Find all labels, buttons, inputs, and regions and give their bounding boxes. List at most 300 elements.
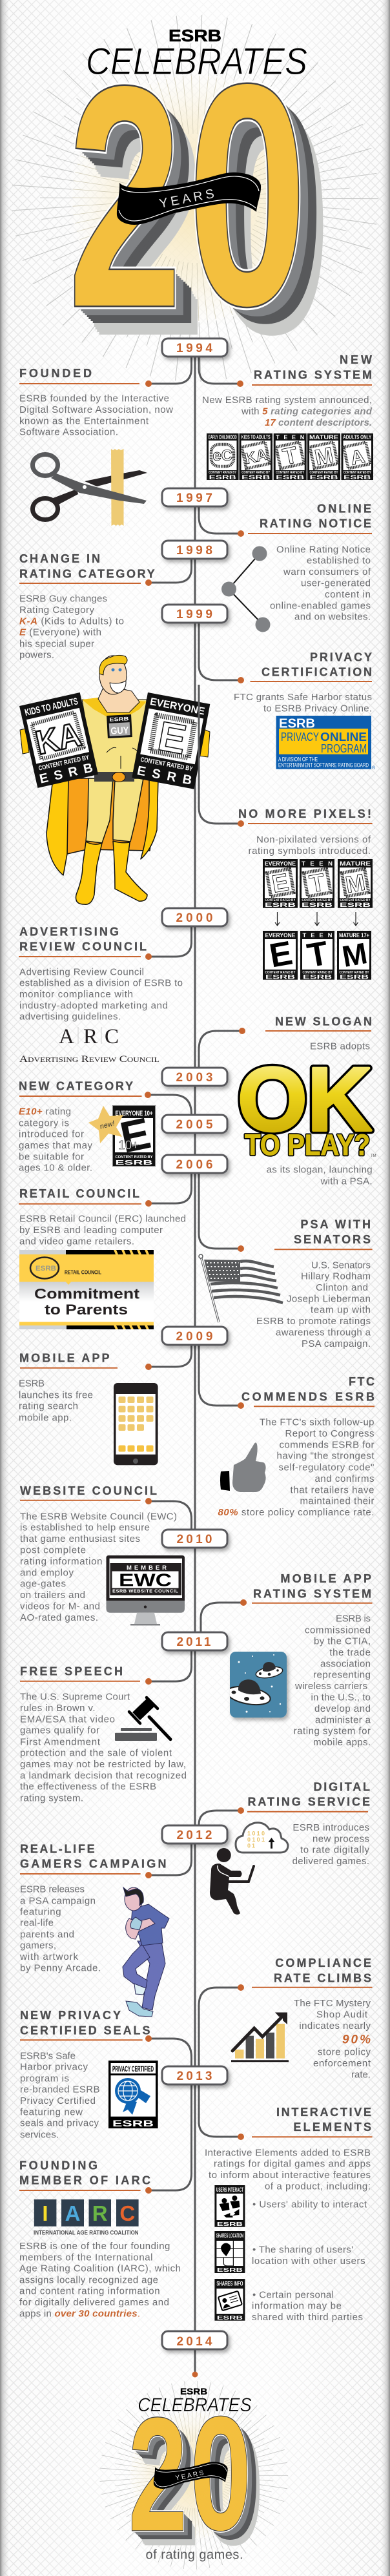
text: website council: age-gates: [20, 1579, 66, 1590]
event: change in rating category 1998: [19, 552, 210, 904]
text: online rating notice: and on websites.: [294, 612, 371, 623]
icons: pixelated symbols: CONTENT RATED BY: [340, 898, 371, 902]
icon: five pixelated rating symbols: KA: [243, 446, 269, 468]
sign: kids to adults: CONTENT RATED BY: [38, 754, 90, 773]
dot: mobile app: [145, 1364, 152, 1370]
year 1998: [162, 541, 227, 559]
text: privacy seals: services.: [20, 2129, 59, 2140]
text: IARC: apps in over 30 countries.: [19, 2309, 140, 2320]
heading: interactive elements: INTERACTIVE: [276, 2106, 371, 2119]
icons: crisp symbols: [263, 931, 371, 981]
text: change in rating category: powers.: [19, 650, 54, 661]
text: FTC commends: commends ESRB for: [279, 1439, 375, 1450]
heading: IARC: FOUNDING: [19, 2159, 98, 2172]
underline: retail council: [19, 1203, 141, 1205]
text: no more pixels: rating symbols introduced.: [248, 846, 371, 857]
closing logo: ESRB celebrates 20 years of rating games: 2: [128, 2384, 187, 2565]
icon: five pixelated rating symbols: KIDS TO ADULTS: [241, 434, 271, 441]
closing logo: ESRB celebrates 20 years of rating games: 0: [190, 2384, 251, 2564]
closing logo: ESRB celebrates 20 years of rating games: 2: [141, 2399, 200, 2576]
text: privacy seals: ESRB's Safe: [20, 2050, 76, 2061]
event: interactive elements: [199, 2085, 373, 2323]
closing logo: ESRB celebrates 20 years of rating games: 2: [132, 2388, 191, 2569]
logo: OK to play: TO PLAY?: [245, 1128, 370, 1161]
text: new rating system: [202, 395, 373, 428]
logo: OK to play: TO PLAY?: [245, 1128, 370, 1161]
year 2012: 2012: [177, 1829, 212, 1842]
icon: shares info: ESRB: [217, 2314, 243, 2321]
connector: privacy certification: [199, 623, 241, 680]
heading: new rating system: [254, 353, 372, 382]
title logo: ESRB celebrates 20 years: [41, 19, 349, 402]
heading: no more pixels: NO MORE PIXELS!: [238, 807, 371, 820]
icons: crisp symbols: MATURE 17+: [339, 932, 369, 939]
sign: kids to adults: [19, 692, 98, 788]
text: compliance: The FTC Mystery: [294, 1998, 371, 2009]
heading: founded: FOUNDED: [19, 367, 92, 380]
connector: website council: [149, 1501, 191, 1529]
heading: change in rating category: [19, 552, 155, 580]
text: mobile app rating system: ESRB is: [336, 1614, 371, 1625]
icons: pixelated symbols: MATURE: [340, 860, 371, 867]
text: FTC commends: [218, 1417, 375, 1518]
text: interactive elements: to inform about interactive features: [209, 2170, 371, 2181]
heading: privacy certification: [262, 650, 372, 679]
heading: IARC: [19, 2159, 150, 2187]
text: personal information: [252, 2289, 363, 2323]
text: privacy seals: seals and privacy: [20, 2118, 99, 2129]
text: IARC: and content rating information: [19, 2286, 160, 2297]
text: online rating notice: Online Rating Notice: [276, 544, 371, 555]
text: retail council: [19, 1214, 186, 1247]
heading: new category: NEW CATEGORY: [19, 1079, 133, 1092]
logo: IARC: [34, 2199, 139, 2236]
text: change in rating category: E (Everyone) with: [19, 627, 101, 638]
year 2012: [162, 1825, 227, 1844]
icons: crisp symbols: ESRB: [303, 974, 333, 981]
closing logo: ESRB celebrates 20 years of rating games: 2: [140, 2398, 198, 2576]
connector: online rating notice: [199, 507, 241, 534]
icon: thumbs up: [220, 1442, 266, 1492]
icon: share network: [221, 546, 270, 632]
year 1998: 1998: [176, 544, 212, 557]
title logo: ESRB celebrates 20 years: YEARS: [158, 187, 215, 211]
illustration: ESRB Guy superhero: [19, 655, 210, 904]
closing logo: ESRB celebrates 20 years of rating games: 0: [190, 2384, 251, 2564]
icon: E10+ rating symbol: ESRB: [115, 1159, 152, 1167]
text: of rating games: of rating games.: [146, 2548, 243, 2562]
year 2000: 2000: [176, 911, 213, 925]
chart: rising compliance bars: [231, 2013, 289, 2061]
heading: FTC commends: COMMENDS ESRB: [241, 1390, 375, 1403]
title logo: ESRB celebrates 20 years: 0: [210, 46, 330, 397]
title logo: ESRB celebrates 20 years: 0: [207, 37, 325, 388]
dot: founded: [145, 380, 152, 387]
heading: website council: WEBSITE COUNCIL: [20, 1484, 157, 1497]
year 2003: 2003: [176, 1071, 213, 1085]
text: FTC commends: The FTC's sixth follow-up: [260, 1417, 375, 1428]
closing logo: ESRB celebrates 20 years of rating games: 0: [198, 2391, 260, 2572]
title logo: ESRB celebrates 20 years: 2: [68, 21, 182, 373]
closing logo: ESRB celebrates 20 years of rating games: 2: [138, 2395, 197, 2576]
closing logo: ESRB celebrates 20 years of rating games: 0: [190, 2384, 251, 2564]
connector: retail council: [149, 1174, 191, 1203]
text: online rating notice: warn consumers of: [283, 566, 371, 577]
text: online rating notice: [270, 544, 371, 623]
sign: kids to adults: KA: [32, 716, 85, 762]
text: real-life gamers: [19, 1884, 101, 1974]
year 2005: 2005: [176, 1118, 213, 1132]
text: real-life gamers: featuring: [20, 1906, 61, 1917]
sign: everyone: ESRB: [136, 763, 193, 788]
icons: crisp symbols: CONTENT RATED BY: [340, 971, 369, 975]
text: new category: category is: [19, 1117, 69, 1128]
closing logo: ESRB celebrates 20 years of rating games: 0: [203, 2398, 264, 2576]
year 2010: 2010: [177, 1533, 212, 1546]
underline: privacy seals: [20, 2039, 143, 2041]
logo: advertising review council: R: [83, 1025, 98, 1048]
text: privacy seals: [20, 2050, 99, 2140]
title logo: ESRB celebrates 20 years: 2: [68, 21, 182, 373]
underline: new category: [19, 1096, 142, 1097]
text: mobile app rating system: association: [320, 1658, 371, 1669]
text: compliance: store policy: [318, 2047, 371, 2058]
text: privacy certification: FTC grants Safe Harbor status: [234, 692, 372, 703]
heading: privacy seals: CERTIFIED SEALS: [20, 2024, 150, 2037]
underline: mobile app rating system: [252, 1603, 373, 1604]
text: PSA with senators: U.S. Senators: [311, 1260, 371, 1271]
text: FTC commends: that retailers have: [291, 1484, 375, 1495]
text: no more pixels: Non-pixilated versions of: [256, 835, 371, 846]
text: privacy seals: program is: [20, 2073, 69, 2084]
icon: cloud upload: 01: [247, 1843, 255, 1849]
illustration: ESRB Guy superhero: ESRB: [109, 716, 129, 723]
heading: real-life gamers: GAMERS CAMPAIGN: [20, 1858, 167, 1871]
connector: FTC commends: [199, 1345, 241, 1406]
heading: advertising review council: REVIEW COUNCIL: [19, 940, 147, 953]
icon: five pixelated rating symbols: ESRB: [276, 474, 305, 481]
year 2011: 2011: [177, 1636, 211, 1649]
sign: everyone: EVERYONE: [149, 696, 206, 718]
logo: IARC: C: [119, 2201, 135, 2225]
icon: cloud upload: [236, 1823, 288, 1853]
icon: five pixelated rating symbols: ESRB: [310, 474, 338, 481]
dot: change in rating category: [145, 579, 152, 586]
event: FTC commends ESRB: [199, 1345, 375, 1518]
year 2006: [162, 1155, 227, 1173]
icons: pixelated symbols: [263, 859, 373, 908]
icons: pixelated symbols: ESRB: [302, 902, 333, 908]
title logo: ESRB celebrates 20 years: 2: [77, 31, 192, 382]
sign: kids to adults: ESRB: [38, 761, 94, 787]
icon: users interact: [214, 2185, 245, 2227]
heading: advertising review council: ADVERTISING: [19, 925, 119, 938]
event: new slogan 2003: [199, 1015, 376, 1187]
icons: pixelated symbols: CONTENT RATED BY: [302, 898, 333, 902]
title logo: ESRB celebrates 20 years: 0: [188, 19, 307, 371]
underline: FTC commends: [254, 1406, 375, 1407]
title logo: ESRB celebrates 20 years: 2: [80, 33, 194, 384]
text: website council: [20, 1511, 177, 1623]
text: website council: The ESRB Website Council (EWC): [20, 1511, 177, 1522]
icon: american flag: [199, 1254, 283, 1322]
event: no more pixels: [199, 685, 373, 981]
dot: no more pixels: [238, 820, 244, 827]
text: new category: introduced for: [19, 1129, 84, 1140]
text: advertising review council: industry-adopted marketing and: [19, 1000, 168, 1011]
heading: FTC commends: FTC: [349, 1375, 375, 1388]
sign: everyone: CONTENT RATED BY: [140, 756, 194, 773]
year 2000: [162, 908, 227, 926]
underline: PSA with senators: [274, 1249, 373, 1250]
text: retail council: by ESRB and leading computer: [19, 1225, 163, 1236]
icon: five pixelated rating symbols: [207, 433, 373, 481]
year 2014: [162, 2331, 227, 2349]
text: website council: on trailers and: [20, 1590, 85, 1601]
text: advertising review council: Advertising Review Council: [19, 966, 144, 977]
icons: crisp symbols: CONTENT RATED BY: [265, 971, 296, 975]
dot: PSA with senators: [238, 1245, 244, 1252]
underline: online rating notice: [248, 533, 372, 534]
text: retail council: and video game retailers.: [19, 1236, 134, 1247]
icon: five pixelated rating symbols: EARLY CHILDHOOD: [209, 434, 237, 441]
graphic: commitment to parents: RETAIL COUNCIL: [65, 1270, 101, 1276]
year 2009: 2009: [176, 1330, 213, 1344]
icons: crisp symbols: E: [267, 934, 295, 975]
dot: mobile app rating system: [240, 1599, 247, 1606]
text: mobile app rating system: commissioned: [305, 1625, 371, 1636]
title logo: ESRB celebrates 20 years: 2: [92, 50, 206, 402]
text: founded: Software Association.: [19, 427, 118, 438]
dot: FTC commends: [238, 1402, 244, 1409]
text: PSA with senators: [256, 1260, 371, 1349]
icon: five pixelated rating symbols: CONTENT RATED BY: [209, 471, 236, 475]
text: free speech: [20, 1692, 187, 1803]
icon: new star: [88, 1106, 123, 1143]
logo: OK to play: OK: [238, 1048, 372, 1150]
year 2005: [162, 1115, 227, 1133]
logo: advertising review council: Advertising Review Council: [19, 1054, 159, 1065]
title logo: ESRB celebrates 20 years: 0: [208, 41, 327, 392]
text: new category: be suitable for: [19, 1151, 84, 1162]
underline: real-life gamers: [20, 1873, 141, 1875]
icons: pixelated symbols: ESRB: [340, 902, 371, 908]
icons: crisp symbols: ESRB: [340, 974, 369, 981]
icon: shares location: SHARES LOCATION: [216, 2232, 243, 2239]
text: PSA with senators: Clinton and: [316, 1282, 368, 1293]
event: retail council 2006: [19, 1174, 191, 1329]
title logo: ESRB celebrates 20 years: 0: [198, 29, 317, 380]
heading: digital rating service: RATING SERVICE: [248, 1796, 370, 1809]
text: free speech: a landmark decision that recognized: [20, 1770, 187, 1781]
text: PSA with senators: ESRB to promote ratings: [256, 1316, 371, 1327]
heading: online rating notice: RATING NOTICE: [260, 517, 371, 530]
connector: compliance: [199, 1988, 241, 2066]
text: online rating notice: established to: [307, 556, 371, 566]
logo: ESRB privacy online program: [276, 716, 376, 771]
year 2013: 2013: [177, 2070, 212, 2083]
underline: website council: [20, 1500, 141, 1501]
text: free speech: rules in Brown v.: [20, 1703, 96, 1714]
connector: PSA with senators: [199, 1174, 241, 1249]
heading: real-life gamers: REAL-LIFE: [20, 1842, 95, 1855]
text: sharing location: • The sharing of users': [252, 2244, 353, 2255]
underline: new slogan: [265, 1030, 371, 1032]
text: privacy certification: to ESRB Privacy Online.: [263, 703, 372, 714]
logo: advertising review council: C: [105, 1025, 119, 1048]
title logo: ESRB celebrates 20 years: 2: [68, 21, 182, 373]
dot: free speech: [145, 1678, 152, 1685]
closing logo: ESRB celebrates 20 years of rating games: 2: [134, 2389, 192, 2570]
text: mobile app rating system: administer a: [315, 1714, 371, 1725]
text: compliance: [294, 1998, 371, 2080]
text: PSA with senators: awareness through a: [276, 1327, 371, 1338]
sign: everyone: [132, 692, 210, 789]
title logo: ESRB celebrates 20 years: 0: [209, 43, 328, 395]
dot: online rating notice: [238, 530, 244, 537]
icon: monitor with EWC member badge: EWC: [119, 1570, 172, 1590]
text: mobile app: rating search: [19, 1401, 78, 1412]
connector: privacy seals: [149, 2039, 191, 2066]
sign: everyone: E: [154, 712, 190, 763]
logo: IARC: R: [92, 2201, 108, 2225]
logo: IARC: A: [65, 2201, 80, 2225]
icon: five pixelated rating symbols: M: [313, 442, 336, 470]
text: advertising review council: [19, 966, 183, 1023]
icon: users interact: USERS INTERACT: [216, 2186, 243, 2193]
icon: E10+ rating symbol: CONTENT RATED BY: [115, 1155, 153, 1159]
icon: five pixelated rating symbols: CONTENT RATED BY: [344, 471, 371, 475]
heading: interactive elements: ELEMENTS: [293, 2121, 371, 2134]
text: real-life gamers: gamers,: [20, 1940, 56, 1951]
text: IARC: members of the International: [19, 2252, 152, 2263]
heading: compliance: COMPLIANCE: [275, 1957, 371, 1969]
text: free speech: First Amendment: [20, 1736, 101, 1747]
heading: PSA with senators: SENATORS: [294, 1233, 371, 1246]
text: compliance: rate.: [351, 2069, 371, 2080]
text: change in rating category: K-A (Kids to Adults) to: [19, 616, 124, 627]
icon: privacy certified seal: PRIVACY CERTIFIED: [112, 2064, 154, 2073]
illustration: ESRB Guy superhero: GUY: [110, 725, 129, 737]
dot: compliance: [238, 1984, 244, 1991]
text: new rating system: with 5 rating categories and: [241, 406, 373, 417]
event: founding member of IARC: [19, 2085, 191, 2320]
title logo: ESRB celebrates 20 years: 0: [192, 23, 311, 375]
connector: real-life gamers: [149, 1844, 191, 1875]
closing logo: ESRB celebrates 20 years of rating games: 0: [193, 2387, 254, 2567]
text: new category: ages 10 & older.: [19, 1163, 92, 1174]
logo: ESRB privacy online program: ONLINE: [320, 731, 367, 743]
underline: new rating system: [252, 384, 372, 386]
connector: no more pixels: [199, 685, 241, 824]
icon: five pixelated rating symbols: ESRB: [344, 474, 371, 481]
text: users ability: • Users' ability to interact: [252, 2199, 367, 2210]
connector: mobile app rating system: [201, 1603, 243, 1632]
heading: compliance: [274, 1957, 371, 1984]
text: mobile app rating system: [294, 1614, 371, 1748]
year 2006: 2006: [176, 1158, 213, 1172]
icon: scissors cutting ribbon: [32, 449, 147, 526]
text: FTC commends: maintained their: [300, 1496, 375, 1507]
heading: compliance: RATE CLIMBS: [274, 1971, 371, 1984]
icon: shares info: [214, 2279, 245, 2321]
text: change in rating category: [19, 594, 124, 661]
text: mobile app rating system: rating system for: [294, 1726, 371, 1737]
text: founded: Digital Software Association, now: [19, 404, 173, 415]
dot: privacy certification: [238, 677, 244, 683]
closing logo: ESRB celebrates 20 years of rating games: 0: [196, 2389, 258, 2570]
text: founded: known as the Entertainment: [19, 415, 149, 426]
text: online rating notice: user-generated: [301, 577, 371, 588]
logo: IARC: INTERNATIONAL AGE RATING COALITION: [34, 2229, 139, 2236]
icon: five pixelated rating symbols: ADULTS ONLY: [343, 434, 372, 441]
text: sharing location: location with other users: [252, 2256, 365, 2267]
text: interactive elements: ratings for digital games and apps: [214, 2159, 371, 2170]
icon: person with laptop: [210, 1848, 254, 1915]
heading: mobile app: MOBILE APP: [19, 1352, 110, 1365]
heading: change in rating category: RATING CATEGORY: [19, 567, 155, 580]
text: real-life gamers: ESRB releases: [20, 1884, 85, 1895]
year 1997: [162, 488, 227, 506]
text: IARC: assigns locally recognized age: [19, 2274, 158, 2285]
heading: FTC commends: [241, 1375, 375, 1403]
text: as its slogan: as its slogan, launching: [267, 1165, 373, 1176]
event: new rating system 1994: [199, 353, 373, 481]
graphic: commitment to parents: [19, 1250, 154, 1329]
year 1997: 1997: [176, 492, 212, 505]
text: mobile app: mobile app.: [19, 1412, 72, 1423]
heading: interactive elements: [276, 2106, 371, 2134]
heading: free speech: FREE SPEECH: [20, 1665, 123, 1678]
text: founded: [19, 393, 173, 438]
closing logo: ESRB celebrates 20 years of rating games: 0: [200, 2394, 262, 2575]
icons: pixelated symbols: CONTENT RATED BY: [265, 898, 296, 902]
closing logo: ESRB celebrates 20 years of rating games: CELEBRATES: [138, 2394, 252, 2416]
text: digital rating service: new process: [313, 1833, 369, 1844]
text: FTC commends: self-regulatory code": [279, 1462, 375, 1473]
text: change in rating category: ESRB Guy changes: [19, 594, 107, 605]
dot: advertising review council: [145, 953, 152, 960]
icon: gavel: [115, 1698, 170, 1741]
dot: digital rating service: [238, 1807, 244, 1814]
text: FTC commends: having "the strongest: [276, 1451, 375, 1462]
title logo: ESRB celebrates 20 years: 0: [202, 33, 321, 384]
year 1994: 1994: [176, 342, 212, 355]
text: sharing location: [252, 2244, 365, 2267]
title logo: ESRB celebrates 20 years: CELEBRATES: [86, 41, 307, 83]
underline: privacy certification: [251, 681, 372, 682]
text: personal information: • Certain personal: [252, 2289, 334, 2300]
event: founded 1994: [19, 357, 191, 526]
connector: new category: [148, 1095, 191, 1114]
logo: advertising review council: [19, 1025, 159, 1065]
icon: monitor with EWC member badge: MEMBER: [127, 1564, 167, 1572]
main timeline line: [194, 357, 196, 2374]
event: new privacy certified seals 2013: [20, 2009, 191, 2140]
dot: retail council: [145, 1200, 152, 1207]
text: IARC: ESRB is one of the four founding: [19, 2241, 170, 2252]
title logo: ESRB celebrates 20 years: 2: [74, 27, 188, 379]
closing logo: ESRB celebrates 20 years of rating games: 2: [138, 2393, 196, 2573]
text: real-life gamers: parents and: [20, 1929, 74, 1940]
connector: IARC: [149, 2085, 191, 2190]
heading: privacy seals: [20, 2009, 150, 2037]
title logo: ESRB celebrates 20 years: 2: [88, 45, 202, 397]
closing logo: ESRB celebrates 20 years of rating games: 0: [198, 2391, 258, 2571]
event: free speech 2011: [20, 1651, 191, 1803]
heading: mobile app rating system: RATING SYSTEM: [253, 1587, 371, 1600]
text: mobile app rating system: wireless carriers: [294, 1681, 367, 1692]
